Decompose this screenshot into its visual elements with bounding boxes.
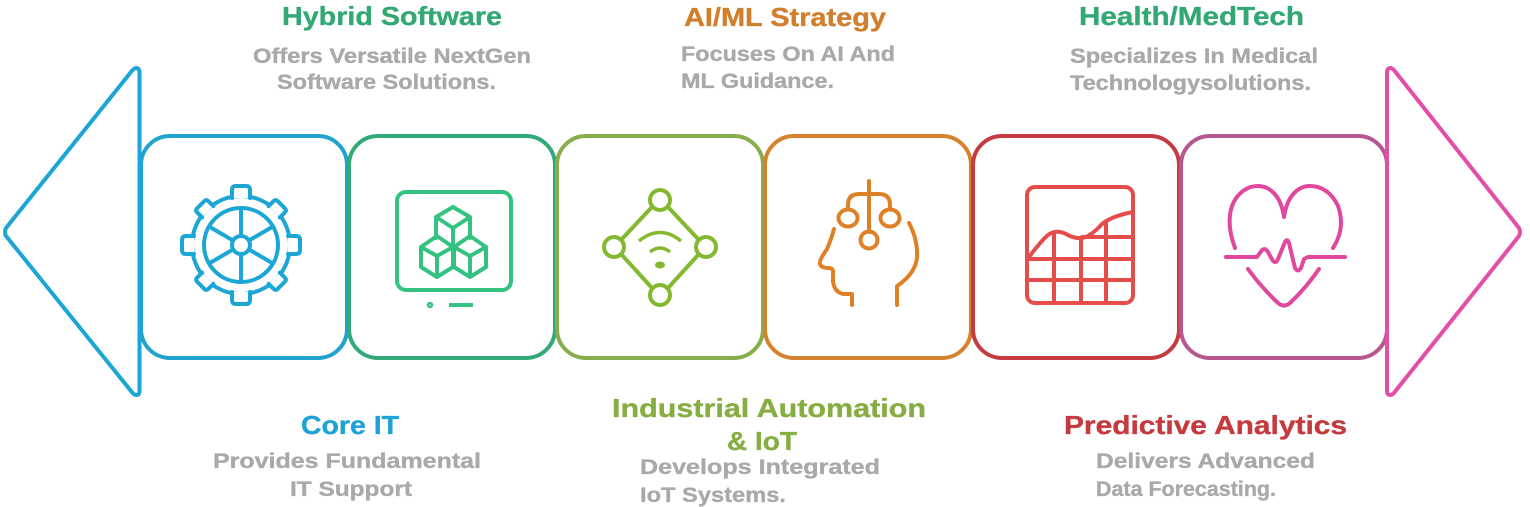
panel: industrial automation box (557, 136, 763, 358)
text block: industrial automation: Develops Integrated (640, 456, 880, 479)
text block: core IT: Core IT (301, 410, 399, 440)
text block: health medtech: Technologysolutions. (1070, 72, 1311, 95)
text block: health medtech: Health/MedTech (1079, 1, 1304, 31)
icon: area chart on grid (1027, 187, 1133, 303)
text block: industrial automation: & IoT (727, 426, 797, 456)
text block: predictive analytics (1064, 410, 1347, 501)
right arrow (1387, 68, 1520, 395)
icon: heart with pulse (1226, 186, 1345, 306)
panel: AI/ML strategy box (765, 136, 971, 358)
left arrow (5, 68, 140, 395)
text block: AI/ML strategy: ML Guidance. (681, 70, 834, 93)
icon: connected wifi diamond (604, 190, 716, 305)
text block: industrial automation: IoT Systems. (640, 484, 786, 507)
icon: gear (182, 186, 300, 304)
text block: hybrid software (253, 1, 531, 94)
panel: core IT box (141, 136, 347, 358)
text block: core IT: IT Support (290, 478, 412, 501)
text block: AI/ML strategy: Focuses On AI And (681, 43, 895, 66)
panel: health medtech box (1181, 136, 1387, 358)
text block: industrial automation: Industrial Automation (612, 393, 926, 423)
text block: health medtech: Specializes In Medical (1070, 45, 1318, 68)
icon: head with circuit (820, 181, 917, 305)
text block: predictive analytics: Predictive Analytics (1064, 410, 1347, 440)
text block: hybrid software: Hybrid Software (282, 1, 502, 31)
text block: predictive analytics: Delivers Advanced (1096, 450, 1315, 473)
text block: industrial automation (612, 393, 926, 507)
panel: hybrid software box (349, 136, 555, 358)
text block: core IT: Provides Fundamental (213, 450, 481, 473)
panel: predictive analytics box (973, 136, 1179, 358)
text block: predictive analytics: Data Forecasting. (1096, 478, 1276, 501)
text block: hybrid software: Offers Versatile NextGen (253, 45, 531, 68)
text block: AI/ML strategy (681, 2, 895, 93)
text block: core IT (213, 410, 481, 501)
icon: monitor with cubes (397, 192, 511, 307)
text block: health medtech (1070, 1, 1318, 95)
text block: hybrid software: Software Solutions. (277, 71, 496, 94)
text block: AI/ML strategy: AI/ML Strategy (684, 2, 887, 32)
